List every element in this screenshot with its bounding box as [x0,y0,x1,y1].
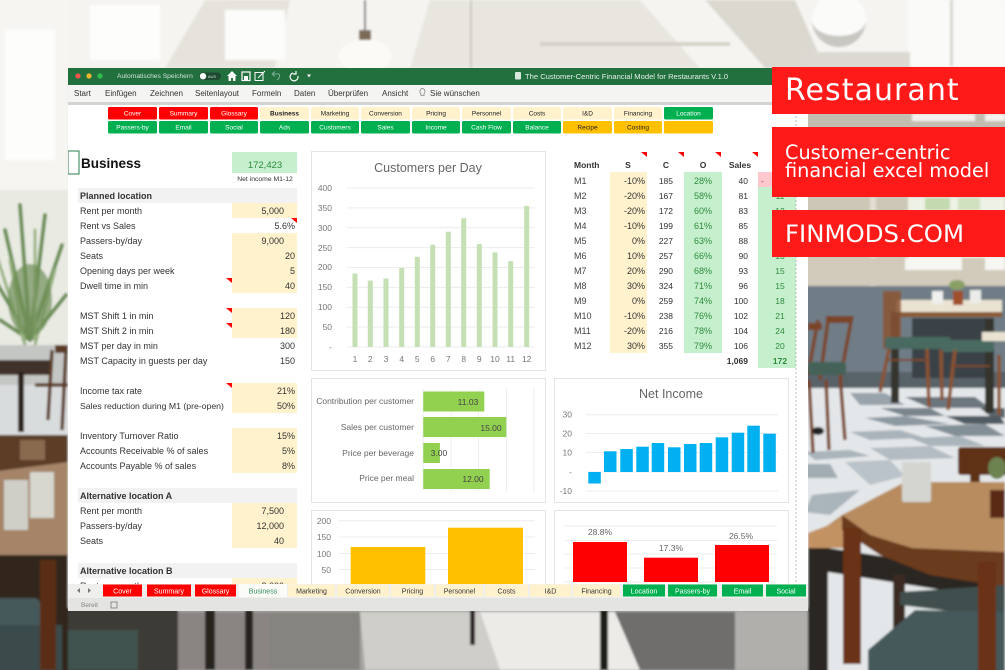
table: monthly drivers: 172 [659,206,673,216]
chart: net income: 20 [563,428,572,438]
ribbon menu: Formeln [252,89,281,98]
table: monthly drivers: 28% [694,176,712,186]
table: monthly drivers: 0% [632,236,645,246]
ribbon title bar: AUS [208,74,216,79]
table: monthly drivers: 21 [775,311,785,321]
section: planned location table [68,151,297,366]
chart: customers per day: 400 [318,183,332,193]
navigation buttons: Income [425,124,447,132]
chart: prices per customer: 12.00 [462,474,484,484]
section: tax and working capital table [80,383,297,473]
section: planned location table: MST Capacity in guests per day [80,356,208,366]
section: planned location table: 180 [280,326,295,336]
section: tax and working capital table: 21% [277,386,295,396]
chart: customers per day: 200 [318,262,332,272]
table: monthly drivers: M12 [574,341,592,351]
ribbon title bar [68,68,808,85]
section: planned location table: 150 [280,356,295,366]
ribbon menu: Überprüfen [328,89,368,98]
table: monthly drivers: 30% [627,281,645,291]
banner: Customer-centric financial excel model: Customer-centric [785,141,951,164]
table: monthly drivers: 15 [775,236,785,246]
excel window [68,68,808,611]
ribbon menu: Daten [294,89,315,98]
table: monthly drivers: 227 [659,236,673,246]
chart: customers per day: 4 [399,354,404,364]
section: planned location table: Dwell time in min [80,281,148,291]
chart: prices per customer: Contribution per customer [316,396,414,406]
sheet tabs: Costs [498,588,516,596]
table: monthly drivers: 100 [734,296,748,306]
chart: customers per day: 50 [323,322,332,332]
chart: red margin columns: 17.3% [659,543,683,553]
bottom floor [68,608,808,670]
navigation buttons: Email [175,124,192,132]
table: monthly drivers: 324 [659,281,673,291]
table: monthly drivers: C [663,160,669,170]
section: planned location table: MST Shift 2 in min [80,326,153,336]
chart: customers per day [312,152,546,370]
right wainscot [805,286,1005,386]
left wall [0,0,68,195]
table: monthly drivers: 66% [694,251,712,261]
navigation buttons: Glossary [221,110,248,118]
chart: red margin columns [554,510,788,600]
chart: prices per customer: 15.00 [480,423,502,433]
navigation buttons: Personnel [472,110,502,118]
table: monthly drivers: 71% [694,281,712,291]
left floor and table [0,345,68,440]
chart: customers per day: 100 [318,302,332,312]
table: monthly drivers: M7 [574,266,587,276]
navigation buttons: Conversion [369,110,402,118]
table: monthly drivers: 30% [627,341,645,351]
chart: customers per day: 300 [318,223,332,233]
section: planned location table: 120 [280,311,295,321]
section: alternative locations table [78,488,297,593]
right wall [805,68,1005,286]
table: monthly drivers: 10% [627,251,645,261]
chart: customers per day: 7 [446,354,451,364]
ribbon menu: Start [74,89,92,98]
chart: customers per day: 11 [506,354,515,364]
table: monthly drivers: 172 [773,356,787,366]
table: monthly drivers: 1,069 [727,356,748,366]
navigation buttons: Summary [170,110,198,118]
navigation buttons: Sales [377,124,394,132]
sheet tabs: Marketing [296,588,327,596]
chart: prices per customer: Sales per customer [341,422,414,432]
table: monthly drivers: 20% [627,266,645,276]
navigation buttons: Marketing [321,110,350,118]
banner: Customer-centric financial excel model [772,127,1005,197]
navigation buttons: Balance [525,124,549,132]
navigation buttons: Costs [529,110,546,118]
sheet tabs: Personnel [444,588,476,596]
front seats [900,585,1005,618]
table: monthly drivers: 216 [659,326,673,336]
table: monthly drivers: 18 [775,296,785,306]
table: monthly drivers: 96 [739,281,748,291]
table: monthly drivers: 167 [659,191,673,201]
back chairs [883,291,901,349]
table: monthly drivers: 85 [739,221,748,231]
table: monthly drivers: 13 [775,221,785,231]
section: planned location table: 20 [285,251,295,261]
back table [896,300,1002,312]
chart: net income: Net Income [639,387,703,401]
section: tax and working capital table: 8% [282,461,295,471]
chart: yellow columns: 150 [317,532,331,542]
section: planned location table: Net income M1-12 [237,176,293,183]
navigation buttons: Recipe [577,124,598,132]
section: planned location table: MST per day in min [80,341,158,351]
section: alternative locations table: Rent per month [80,581,142,591]
table: monthly drivers: 60% [694,206,712,216]
table: monthly drivers: Sales [729,160,751,170]
table: monthly drivers: -20% [624,326,645,336]
table: monthly drivers: 185 [659,176,673,186]
sheet tabs: Cover [113,588,132,596]
navigation buttons: Social [225,124,243,132]
table: monthly drivers: 238 [659,311,673,321]
section: planned location table: Seats [80,251,104,261]
table: monthly drivers: M2 [574,191,587,201]
right floor [805,388,1005,670]
ribbon title bar: Automatisches Speichern [117,73,193,80]
table: monthly drivers: 81 [739,191,748,201]
table: monthly drivers: M6 [574,251,587,261]
chart: net income: 30 [563,410,572,420]
chart: customers per day: 3 [384,354,389,364]
front wooden table [808,548,828,670]
table: monthly drivers: 11 [776,191,785,201]
navigation buttons: I&D [582,110,593,118]
ribbon menu [68,85,808,105]
chart: prices per customer: Price per meal [359,473,414,483]
chart: prices per customer: 3.00 [431,448,448,458]
table: monthly drivers: M11 [574,326,591,336]
lamps [339,39,391,73]
navigation buttons [108,107,713,134]
section: planned location table: Rent per month [80,206,142,216]
chart: customers per day: 12 [522,354,532,364]
sheet tabs: Email [734,588,752,596]
section: planned location table: Planned location [80,191,152,201]
ribbon title bar: The Customer-Centric Financial Model for Restaurants V.1.0 [525,72,728,81]
section: alternative locations table: Alternative location A [80,491,173,501]
section: planned location table: Rent vs Sales [80,221,136,231]
section: alternative locations table: 3,000 [261,581,284,591]
navigation buttons: Pricing [426,110,446,118]
chart: customers per day: 250 [318,243,332,253]
table: monthly drivers: -20% [624,191,645,201]
table: monthly drivers: 24 [775,326,785,336]
sheet tabs: Financing [581,588,612,596]
table: monthly drivers: 13 [775,251,785,261]
sheet tabs: I&D [545,588,556,596]
chart: customers per day: 5 [415,354,420,364]
section: tax and working capital table: 50% [277,401,295,411]
navigation buttons: Cover [124,110,142,118]
table: monthly drivers: 290 [659,266,673,276]
section: planned location table: 40 [285,281,295,291]
table: monthly drivers [574,152,796,368]
chart: customers per day: 350 [318,203,332,213]
table: monthly drivers: 102 [734,311,748,321]
navigation buttons: Business [270,110,299,118]
banner: Customer-centric financial excel model: financial excel model [785,159,989,182]
banner: FINMODS.COM [772,210,1005,257]
sheet tabs: Social [776,588,796,596]
sheet tabs [68,584,808,598]
table: monthly drivers: 63% [694,236,712,246]
chart: prices per customer: Price per beverage [342,448,414,458]
navigation buttons: Passers-by [116,124,150,132]
table: monthly drivers: M1 [574,176,587,186]
chart: net income: - [569,467,572,477]
table: monthly drivers: 74% [694,296,712,306]
table: monthly drivers: M5 [574,236,587,246]
chart: yellow columns [312,510,546,600]
table: monthly drivers: -10% [624,221,645,231]
table: monthly drivers: 88 [739,236,748,246]
chart: customers per day: 6 [430,354,435,364]
table: monthly drivers: O [700,160,707,170]
table: monthly drivers: 104 [734,326,748,336]
sheet tabs: Passers-by [675,588,711,596]
chart: yellow columns: 200 [317,516,331,526]
ribbon menu: Zeichnen [150,89,183,98]
section: alternative locations table: Passers-by/day [80,521,143,531]
chart: customers per day: 9 [477,354,482,364]
section: tax and working capital table: Accounts Receivable % of sales [80,446,209,456]
left foreground chairs and table [0,435,68,475]
section: planned location table: 5 [290,266,295,276]
section: planned location table: Opening days per week [80,266,175,276]
navigation buttons: Financing [624,110,652,118]
ribbon menu: Sie wünschen [430,89,480,98]
navigation buttons: Location [676,110,701,118]
section: tax and working capital table: 5% [282,446,295,456]
table: monthly drivers: 40 [739,176,748,186]
table: monthly drivers: - [761,176,764,186]
section: planned location table: 9,000 [261,236,284,246]
sheet tabs: Location [631,588,657,596]
table: monthly drivers: 15 [775,266,785,276]
chart: red margin columns: 28.8% [588,527,612,537]
section: alternative locations table: Alternative location B [80,566,173,576]
chart: customers per day: 8 [461,354,466,364]
chart: customers per day: - [329,342,332,352]
table: monthly drivers: Month [574,160,600,170]
banner: Restaurant [772,67,1005,114]
section: alternative locations table: 7,500 [261,506,284,516]
left plant [0,205,66,340]
chart: customers per day: 10 [490,354,500,364]
navigation buttons: Cash Flow [471,124,502,132]
table: monthly drivers: M4 [574,221,587,231]
front-left chairs [808,316,852,453]
table: monthly drivers: -10% [624,176,645,186]
chart: customers per day: 2 [368,354,373,364]
sheet tabs: Business [249,588,278,596]
navigation buttons: Customers [319,124,351,132]
table: monthly drivers: 259 [659,296,673,306]
navigation buttons: Ads [279,124,291,132]
section: alternative locations table: Rent per month [80,506,142,516]
ribbon menu: Ansicht [382,89,409,98]
section: tax and working capital table: Accounts Payable % of sales [80,461,197,471]
table: monthly drivers: 76% [694,311,712,321]
table: monthly drivers: 12 [775,206,785,216]
section: tax and working capital table: Income tax rate [80,386,142,396]
table: monthly drivers: 355 [659,341,673,351]
table: monthly drivers: -20% [624,206,645,216]
chart: net income: -10 [560,486,572,496]
chart: yellow columns: 100 [317,549,331,559]
section: planned location table: MST Shift 1 in min [80,311,153,321]
section: planned location table: Passers-by/day [80,236,143,246]
section: planned location table: 5,000 [261,206,284,216]
table: monthly drivers: 257 [659,251,673,261]
chart: customers per day: 1 [353,354,358,364]
table: monthly drivers: 20 [775,341,785,351]
sheet tabs: Glossary [202,588,230,596]
table: monthly drivers: 93 [739,266,748,276]
table: monthly drivers: 79% [694,341,712,351]
status bar: Bereit [81,602,98,609]
table: monthly drivers: 58% [694,191,712,201]
table: monthly drivers: 199 [659,221,673,231]
chart: customers per day: Customers per Day [374,161,483,175]
section: planned location table: Business [81,156,141,171]
section: alternative locations table: 40 [274,536,284,546]
section: planned location table: 5.6% [274,221,295,231]
ceiling [0,0,1005,68]
table: monthly drivers: S [625,160,631,170]
table: monthly drivers: M10 [574,311,592,321]
table: monthly drivers: M3 [574,206,587,216]
section: tax and working capital table: Inventory Turnover Ratio [80,431,179,441]
chart: prices per customer [312,378,546,502]
table: monthly drivers: 90 [739,251,748,261]
table: monthly drivers: 15 [775,281,785,291]
section: alternative locations table: 12,000 [256,521,284,531]
navigation buttons: Costing [627,124,649,132]
chart: prices per customer: 11.03 [458,397,479,407]
chart: customers per day: 150 [318,282,332,292]
ribbon menu: Einfügen [105,89,137,98]
chart: yellow columns: 50 [322,565,331,575]
sheet tabs: Pricing [402,588,423,596]
section: planned location table: 300 [280,341,295,351]
banner: Restaurant: Restaurant [785,73,960,108]
table: monthly drivers: M8 [574,281,587,291]
table: monthly drivers: M9 [574,296,587,306]
sheet tabs: Summary [154,588,184,596]
table: monthly drivers: 78% [694,326,712,336]
table: monthly drivers: 83 [739,206,748,216]
ribbon menu: Seitenlayout [195,89,240,98]
section: alternative locations table: Seats [80,536,104,546]
section: planned location table: 172,423 [248,160,282,171]
table: monthly drivers: 61% [694,221,712,231]
chart: net income [554,378,788,502]
banner: FINMODS.COM: FINMODS.COM [785,219,964,248]
section: tax and working capital table: Sales reduction during M1 (pre-open) [80,401,224,411]
status bar [68,598,808,611]
chart: net income: 10 [563,448,572,458]
chart: red margin columns: 26.5% [729,531,753,541]
table: monthly drivers: 0% [632,296,645,306]
front table chair back and plant [958,447,1005,475]
table: monthly drivers: 68% [694,266,712,276]
table: monthly drivers: 106 [734,341,748,351]
table: monthly drivers: -10% [624,311,645,321]
section: tax and working capital table: 15% [277,431,295,441]
sheet tabs: Conversion [345,588,381,596]
